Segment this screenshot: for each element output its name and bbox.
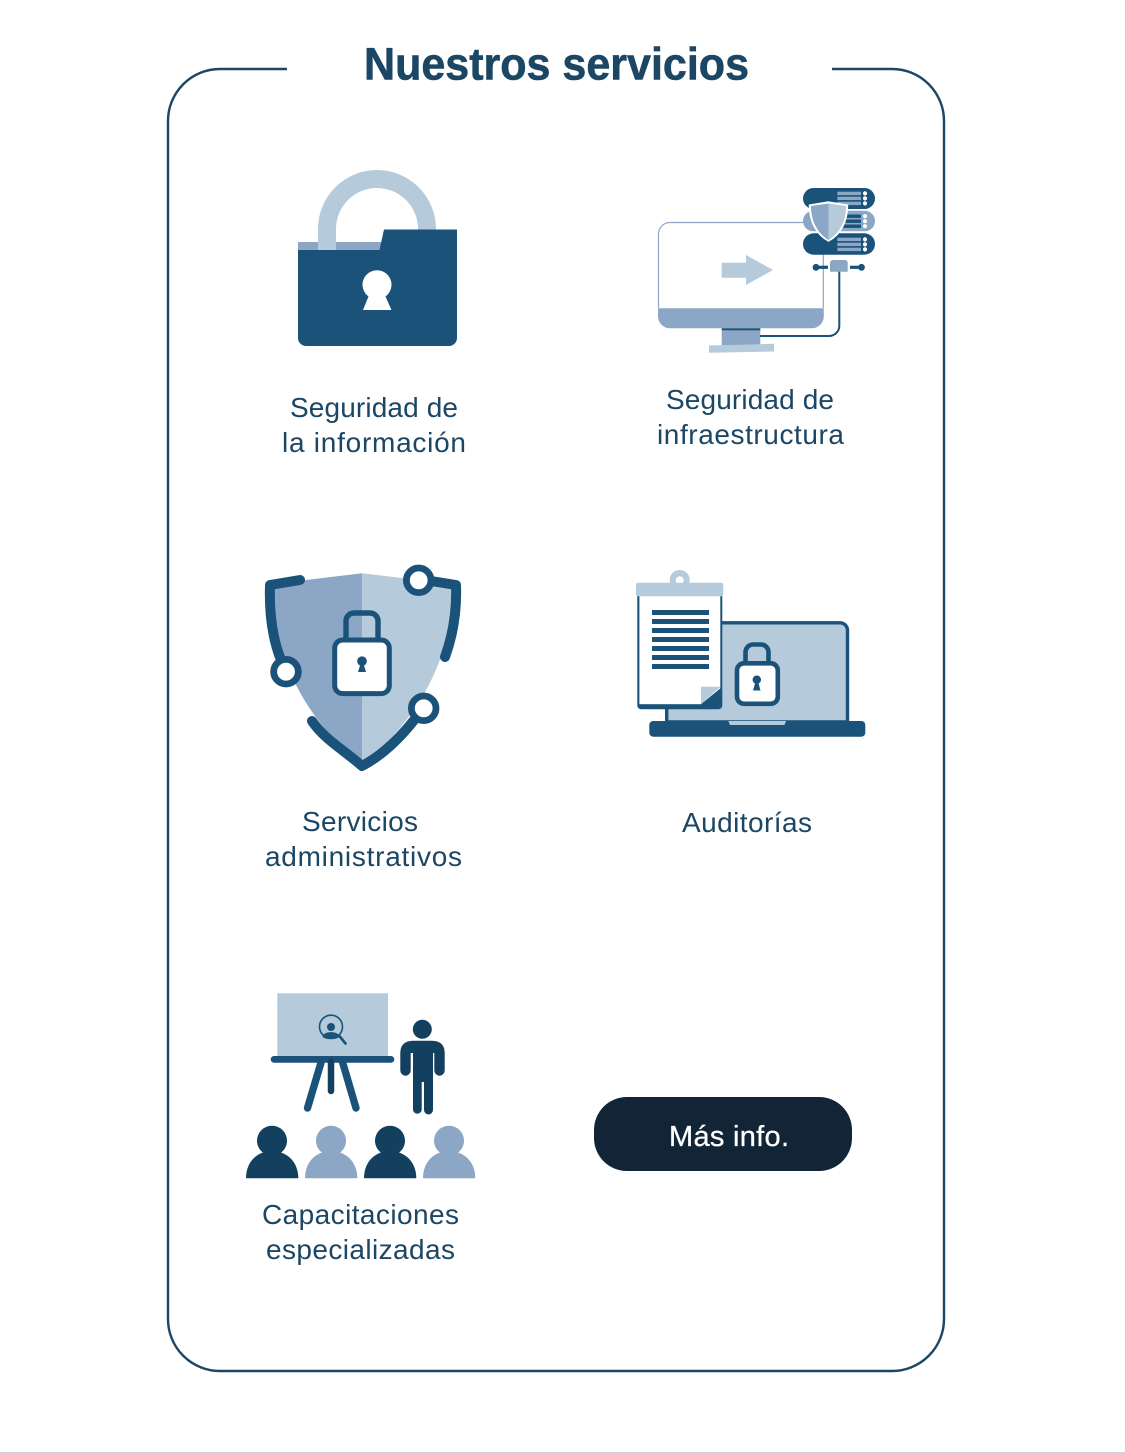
label [657, 384, 844, 450]
label: Seguridad de [666, 384, 834, 415]
label [282, 392, 466, 458]
label: Capacitaciones [262, 1199, 459, 1230]
icon: monitor and servers [658, 188, 875, 353]
service: Servicios administrativos [265, 568, 462, 872]
label: Servicios [302, 806, 418, 837]
label [265, 806, 462, 872]
icon: padlock folder [298, 179, 457, 346]
icon: document and laptop [636, 570, 865, 737]
service: Auditorías [636, 570, 865, 838]
service: Capacitaciones especializadas [246, 993, 475, 1265]
button: Más info.: Más info. [669, 1121, 789, 1153]
button: Más info. [594, 1097, 852, 1171]
label: la información [282, 427, 466, 458]
label: Auditorías [682, 807, 812, 838]
label: especializadas [266, 1234, 455, 1265]
icon: shield with padlock [270, 568, 456, 766]
label: Seguridad de [290, 392, 458, 423]
panel: services frame [168, 69, 944, 1371]
label: administrativos [265, 841, 462, 872]
label: infraestructura [657, 419, 844, 450]
icon: presenter and audience [246, 993, 475, 1178]
title: Nuestros servicios [364, 38, 749, 90]
service: Seguridad de infraestructura [657, 188, 875, 450]
service: Seguridad de la información [282, 179, 466, 458]
label [262, 1199, 459, 1265]
